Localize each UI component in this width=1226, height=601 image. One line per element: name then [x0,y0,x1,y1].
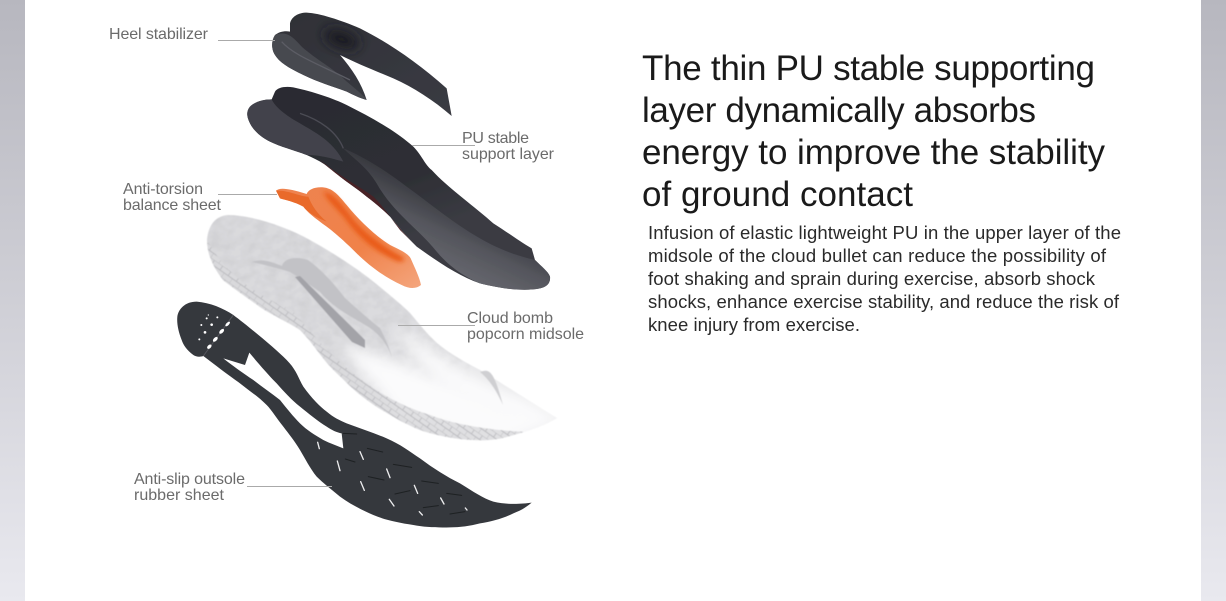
label: anti-slip outsole rubber sheet: Anti-slip outsole [134,471,245,488]
left side bar [0,0,25,601]
outsole tread grooves [343,433,465,514]
midsole toe crease [480,371,503,405]
popcorn mottling [212,219,409,354]
midsole heel pocket [252,258,392,358]
anti-torsion balance sheet [276,187,421,288]
label: anti-slip outsole rubber sheet: rubber sheet [134,487,225,504]
cloud bomb popcorn midsole [206,214,556,441]
leader line: cloud bomb popcorn midsole [398,324,475,326]
body paragraph: Infusion of elastic lightweight PU in the upper layer of the [648,222,1121,243]
body paragraph: midsole of the cloud bullet can reduce the possibility of [648,245,1107,266]
leader line: PU stable support layer [412,144,475,146]
label: PU stable support layer [462,130,555,163]
heel stabilizer layer [272,13,452,116]
outsole forefoot holes [198,314,231,350]
body paragraph: foot shaking and sprain during exercise, absorb shock [648,268,1096,289]
midsole centre slit [295,276,365,348]
exploded shoe sole diagram [177,13,560,527]
leader line: heel stabilizer [218,40,275,42]
anti-slip outsole rubber sheet [177,302,532,527]
heading [642,49,1106,214]
body paragraph: shocks, enhance exercise stability, and reduce the risk of [648,291,1120,312]
label: cloud bomb popcorn midsole [467,310,584,343]
right side bar [1201,0,1226,601]
label: heel stabilizer: Heel stabilizer [109,26,209,43]
outsole tread slits [318,442,467,515]
heading: of ground contact [642,175,913,214]
label: anti-torsion balance sheet [123,181,222,214]
label: cloud bomb popcorn midsole: Cloud bomb [467,310,553,327]
label: anti-torsion balance sheet: balance sheet [123,197,222,214]
label: PU stable support layer: PU stable [462,130,529,147]
body paragraph [648,222,1121,335]
heading: layer dynamically absorbs [642,91,1036,130]
label: PU stable support layer: support layer [462,146,555,163]
PU stable support layer [247,87,550,290]
heading: energy to improve the stability [642,133,1106,172]
label: anti-torsion balance sheet: Anti-torsion [123,181,203,198]
label: anti-slip outsole rubber sheet [134,471,245,504]
leader line: anti-slip outsole [247,486,332,488]
leader line: anti-torsion balance sheet [218,194,277,196]
heading: The thin PU stable supporting [642,49,1095,88]
body paragraph: knee injury from exercise. [648,314,860,335]
label: cloud bomb popcorn midsole: popcorn midsole [467,326,584,343]
